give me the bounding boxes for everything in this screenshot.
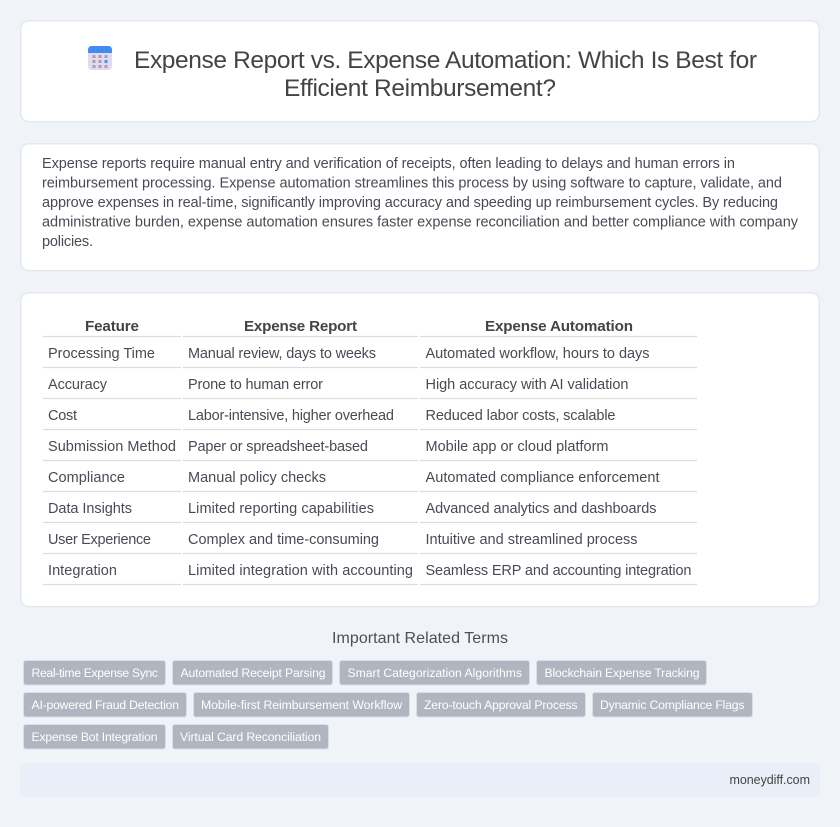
chip: ai fraud detection: AI-powered Fraud Detection [32, 698, 179, 712]
chip: smart categorization [340, 660, 530, 685]
summary text: administrative burden, expense automation ensures faster expense reconciliation and better compliance with company [42, 214, 799, 230]
chip: virtual card: Virtual Card Reconciliation [180, 730, 321, 744]
chip: virtual card [172, 724, 328, 749]
chip: blockchain expense tracking: Blockchain Expense Tracking [544, 666, 700, 680]
row: cost: Labor-intensive, higher overhead [188, 408, 394, 424]
summary text [42, 156, 799, 250]
chip: real-time expense sync [24, 660, 166, 685]
chip: smart categorization: Smart Categorization Algorithms [348, 666, 522, 680]
row: accuracy [48, 377, 628, 393]
row: cost: Cost [48, 408, 77, 424]
row: user experience: Intuitive and streamlined process [426, 532, 638, 548]
row: accuracy: High accuracy with AI validation [426, 377, 628, 393]
title: Efficient Reimbursement? [284, 75, 556, 102]
row: compliance: Automated compliance enforcement [426, 470, 660, 486]
row: cost [48, 408, 616, 424]
row: processing time: Processing Time [48, 346, 155, 362]
footer: moneydiff.com [730, 773, 810, 787]
panel: summary [21, 144, 819, 271]
table header: Expense Automation [485, 318, 633, 335]
row: submission method [48, 439, 608, 455]
row: integration: Integration [48, 563, 117, 579]
chip: zero-touch approval [416, 692, 586, 717]
panel: comparison table [21, 293, 819, 607]
heading: related terms: Important Related Terms [332, 630, 508, 647]
summary text: policies. [42, 234, 93, 250]
title: Expense Report vs. Expense Automation: Which Is Best for [134, 47, 757, 74]
row: integration: Seamless ERP and accounting integration [426, 563, 692, 579]
row: user experience: User Experience [48, 532, 151, 548]
table header: Expense Report [244, 318, 357, 335]
row: integration: Limited integration with accounting [188, 563, 413, 579]
row: integration [48, 563, 692, 579]
panel: header [21, 21, 819, 122]
row: data insights: Data Insights [48, 501, 132, 517]
row: user experience [48, 532, 638, 548]
row: processing time [48, 346, 650, 362]
table header: Feature [85, 318, 139, 335]
row: data insights [48, 501, 656, 517]
row: user experience: Complex and time-consuming [188, 532, 379, 548]
row: compliance [48, 470, 660, 486]
summary text: reimbursement processing. Expense automation streamlines this process by using software to capture, validate, and [42, 176, 782, 192]
chip: mobile-first workflow [194, 692, 410, 717]
chip: expense bot: Expense Bot Integration [32, 730, 158, 744]
chip: mobile-first workflow: Mobile-first Reimbursement Workflow [201, 698, 402, 712]
row: data insights: Advanced analytics and dashboards [426, 501, 656, 517]
row: accuracy: Prone to human error [188, 377, 323, 393]
row: cost: Reduced labor costs, scalable [426, 408, 616, 424]
title [134, 47, 757, 102]
row: data insights: Limited reporting capabilities [188, 501, 374, 517]
chip: real-time expense sync: Real-time Expense Sync [32, 666, 158, 680]
summary text: Expense reports require manual entry and verification of receipts, often leading to delays and human errors in [42, 156, 735, 172]
row: compliance: Manual policy checks [188, 470, 326, 486]
chip: compliance flags: Dynamic Compliance Flags [600, 698, 744, 712]
row: accuracy: Accuracy [48, 377, 108, 393]
row: submission method: Submission Method [48, 439, 176, 455]
table header [85, 318, 633, 335]
chip: blockchain expense tracking [536, 660, 706, 685]
row: compliance: Compliance [48, 470, 125, 486]
chip: compliance flags [592, 692, 752, 717]
row: processing time: Automated workflow, hours to days [426, 346, 650, 362]
chip: expense bot [24, 724, 166, 749]
chip: automated receipt parsing: Automated Receipt Parsing [180, 666, 326, 680]
row: submission method: Mobile app or cloud platform [426, 439, 608, 455]
summary text: approve expenses in real-time, significantly improving accuracy and speeding up reimbursement cycles. By reducing [42, 195, 778, 211]
row: submission method: Paper or spreadsheet-based [188, 439, 368, 455]
footer [20, 763, 820, 797]
chip: ai fraud detection [24, 692, 186, 717]
chip: automated receipt parsing [172, 660, 332, 685]
icon: calendar [88, 46, 112, 70]
row: processing time: Manual review, days to weeks [188, 346, 376, 362]
related terms chips [24, 660, 752, 749]
chip: zero-touch approval: Zero-touch Approval Process [424, 698, 578, 712]
